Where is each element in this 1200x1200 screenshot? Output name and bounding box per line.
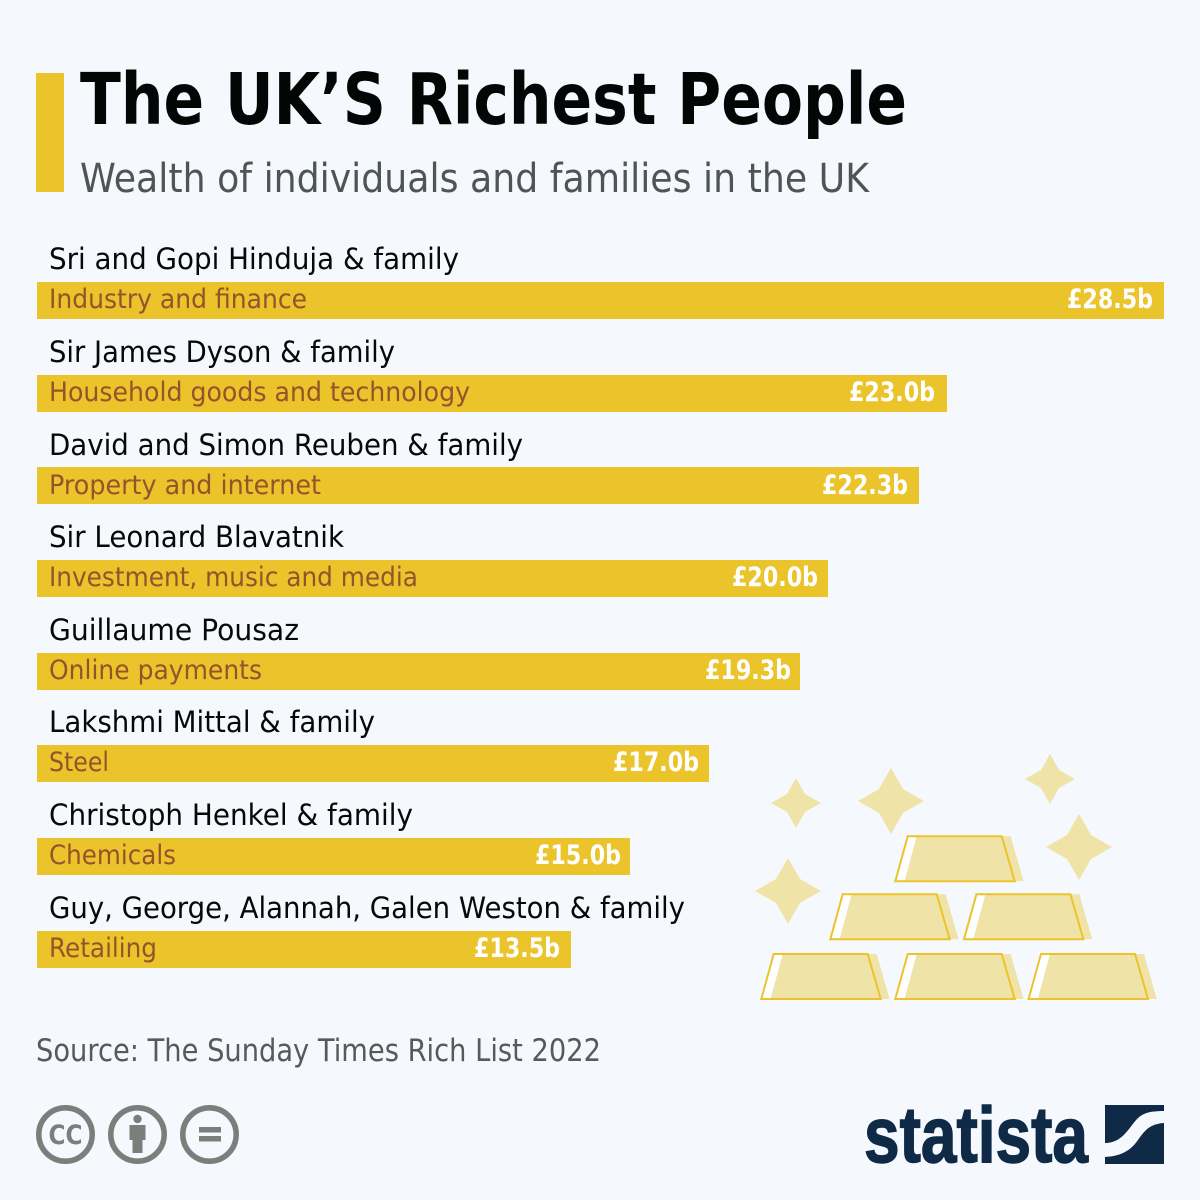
bar row: Henkel: Chemicals — [49, 840, 176, 871]
bar row: Dyson: Household goods and technology — [49, 377, 470, 408]
title: The UK’S Richest People — [80, 58, 907, 141]
bar row: Pousaz: Online payments — [49, 655, 262, 686]
icon: attribution — [111, 1108, 164, 1161]
bar row: Blavatnik — [37, 520, 828, 597]
bar row: Dyson: £23.0b — [849, 377, 935, 408]
bar row: Weston: £13.5b — [474, 933, 560, 964]
bar row: Mittal: Lakshmi Mittal & family — [49, 705, 375, 739]
bar row: Hinduja: Sri and Gopi Hinduja & family — [49, 242, 459, 276]
icon: no derivatives — [183, 1108, 236, 1161]
bar row: Henkel: Christoph Henkel & family — [49, 798, 413, 832]
bar row: Blavatnik: £20.0b — [732, 562, 818, 593]
bar row: Pousaz — [37, 613, 800, 690]
subtitle: Wealth of individuals and families in the UK — [80, 156, 871, 202]
illustration: gold bars and sparkles — [755, 754, 1157, 999]
bar row: Henkel: £15.0b — [535, 840, 621, 871]
bar row: Hinduja: £28.5b — [1067, 284, 1153, 315]
bar row: Reuben: David and Simon Reuben & family — [49, 428, 523, 462]
bar row: Weston: Guy, George, Alannah, Galen Weston & family — [49, 891, 685, 925]
bar row: Weston — [37, 891, 685, 968]
bar row: Reuben: Property and internet — [49, 470, 321, 501]
bar row: Pousaz: Guillaume Pousaz — [49, 613, 299, 647]
bar row: Reuben: £22.3b — [822, 470, 908, 501]
bar row: Mittal: £17.0b — [613, 747, 699, 778]
bar row: Blavatnik: Sir Leonard Blavatnik — [49, 520, 344, 554]
bar row: Mittal: Steel — [49, 747, 109, 778]
bar row: Henkel — [37, 798, 630, 875]
bar row: Reuben — [37, 428, 919, 504]
bar row: Weston: Retailing — [49, 933, 157, 964]
accent bar — [36, 73, 64, 192]
bar row: Dyson: Sir James Dyson & family — [49, 335, 395, 369]
statista wordmark: statista — [864, 1090, 1089, 1179]
bar row: Hinduja — [37, 242, 1164, 319]
bar row: Blavatnik: Investment, music and media — [49, 562, 418, 593]
bar row: Dyson — [37, 335, 947, 412]
bar row: Hinduja: Industry and finance — [49, 284, 307, 315]
icon: creative commons: CC — [48, 1120, 82, 1151]
bar row: Pousaz: £19.3b — [705, 655, 791, 686]
statista logo mark — [1105, 1105, 1164, 1164]
source: Source: The Sunday Times Rich List 2022 — [36, 1033, 601, 1069]
icon: creative commons — [39, 1108, 92, 1161]
bar row: Mittal — [37, 705, 709, 782]
